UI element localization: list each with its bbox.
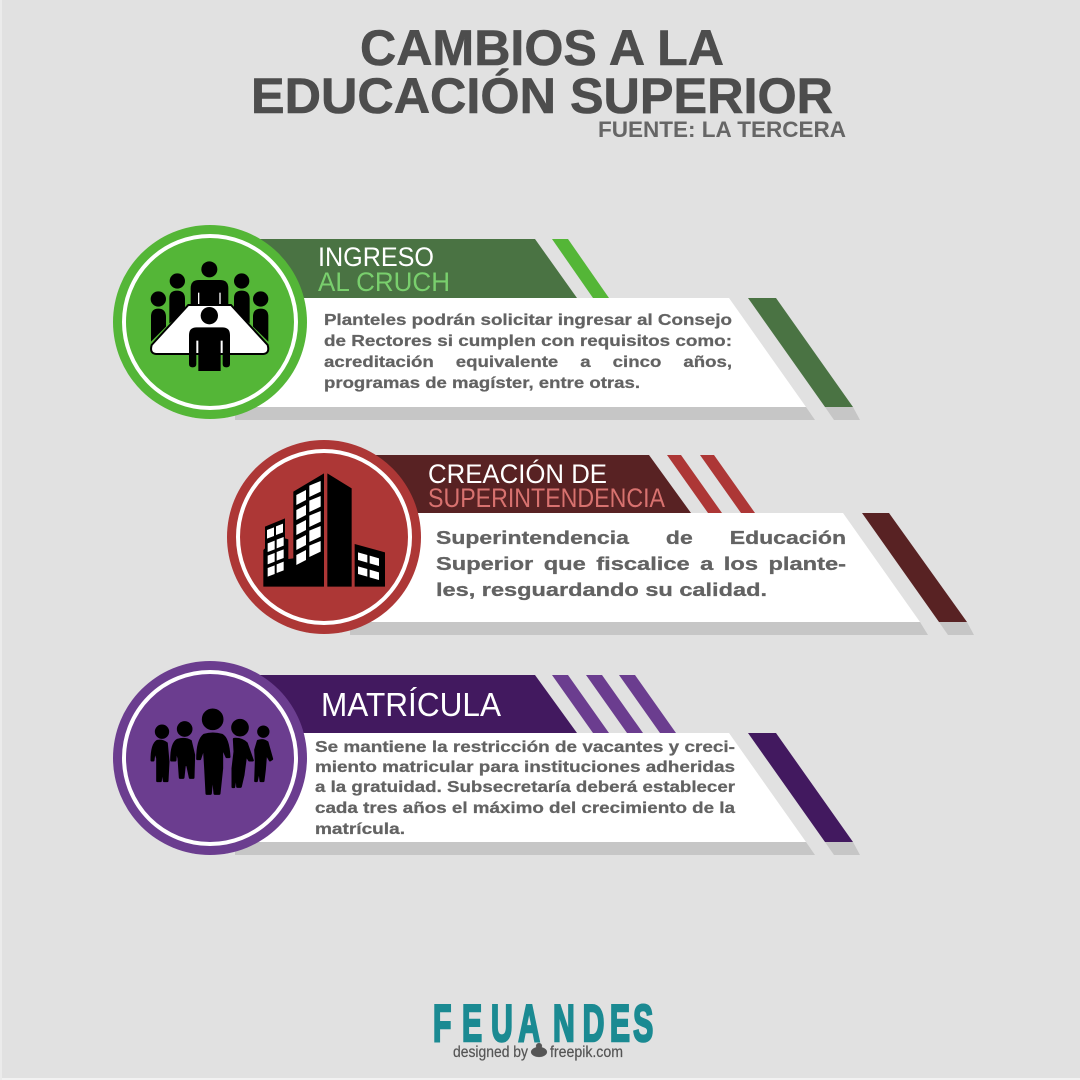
- panel: matricula: [113, 661, 860, 855]
- heading: CREACIÓN DE: [428, 458, 607, 489]
- panel: creacion de superintendencia: [227, 440, 974, 635]
- body text: les, resguardando su calidad.: [436, 580, 767, 600]
- body text: [324, 312, 732, 392]
- credit: designed by freepik: [453, 1043, 623, 1061]
- title: CAMBIOS A LA: [360, 20, 724, 76]
- title: EDUCACIÓN SUPERIOR: [251, 68, 833, 124]
- body text: acreditación equivalente a cinco años,: [324, 354, 732, 371]
- body text: [315, 739, 735, 838]
- icon: freepik logo: [531, 1043, 547, 1057]
- title: [251, 20, 833, 124]
- body text: de Rectores si cumplen con requisitos como:: [324, 333, 732, 350]
- heading: [428, 458, 665, 513]
- credit: designed by freepik: freepik.com: [550, 1044, 623, 1061]
- icon: buildings: [227, 440, 421, 634]
- body text: Superior que fiscalice a los plante-: [436, 554, 846, 574]
- body text: programas de magíster, entre otras.: [324, 375, 640, 392]
- heading: MATRÍCULA: [321, 686, 501, 723]
- panel: ingreso al CRUCH: [113, 225, 860, 420]
- body text: a la gratuidad. Subsecretaría deberá establecer: [315, 779, 735, 796]
- body text: Superintendencia de Educación: [436, 528, 846, 548]
- body text: [436, 528, 846, 600]
- heading: AL CRUCH: [318, 267, 450, 297]
- icon: group of people: [113, 661, 307, 855]
- heading: [318, 242, 450, 297]
- body text: cada tres años el máximo del crecimiento de la: [315, 800, 735, 817]
- body text: matrícula.: [315, 821, 405, 838]
- body text: Se mantiene la restricción de vacantes y creci-: [315, 739, 735, 756]
- icon: meeting table: [113, 225, 307, 419]
- logo: FEUANDES: FEUANDES: [433, 996, 653, 1053]
- body text: miento matricular para instituciones adheridas: [315, 759, 735, 776]
- credit: designed by freepik: designed by: [453, 1044, 528, 1061]
- heading: SUPERINTENDENCIA: [428, 483, 665, 513]
- heading: INGRESO: [318, 242, 434, 272]
- source line: FUENTE: LA TERCERA: [598, 117, 846, 142]
- body text: Planteles podrán solicitar ingresar al Consejo: [324, 312, 732, 329]
